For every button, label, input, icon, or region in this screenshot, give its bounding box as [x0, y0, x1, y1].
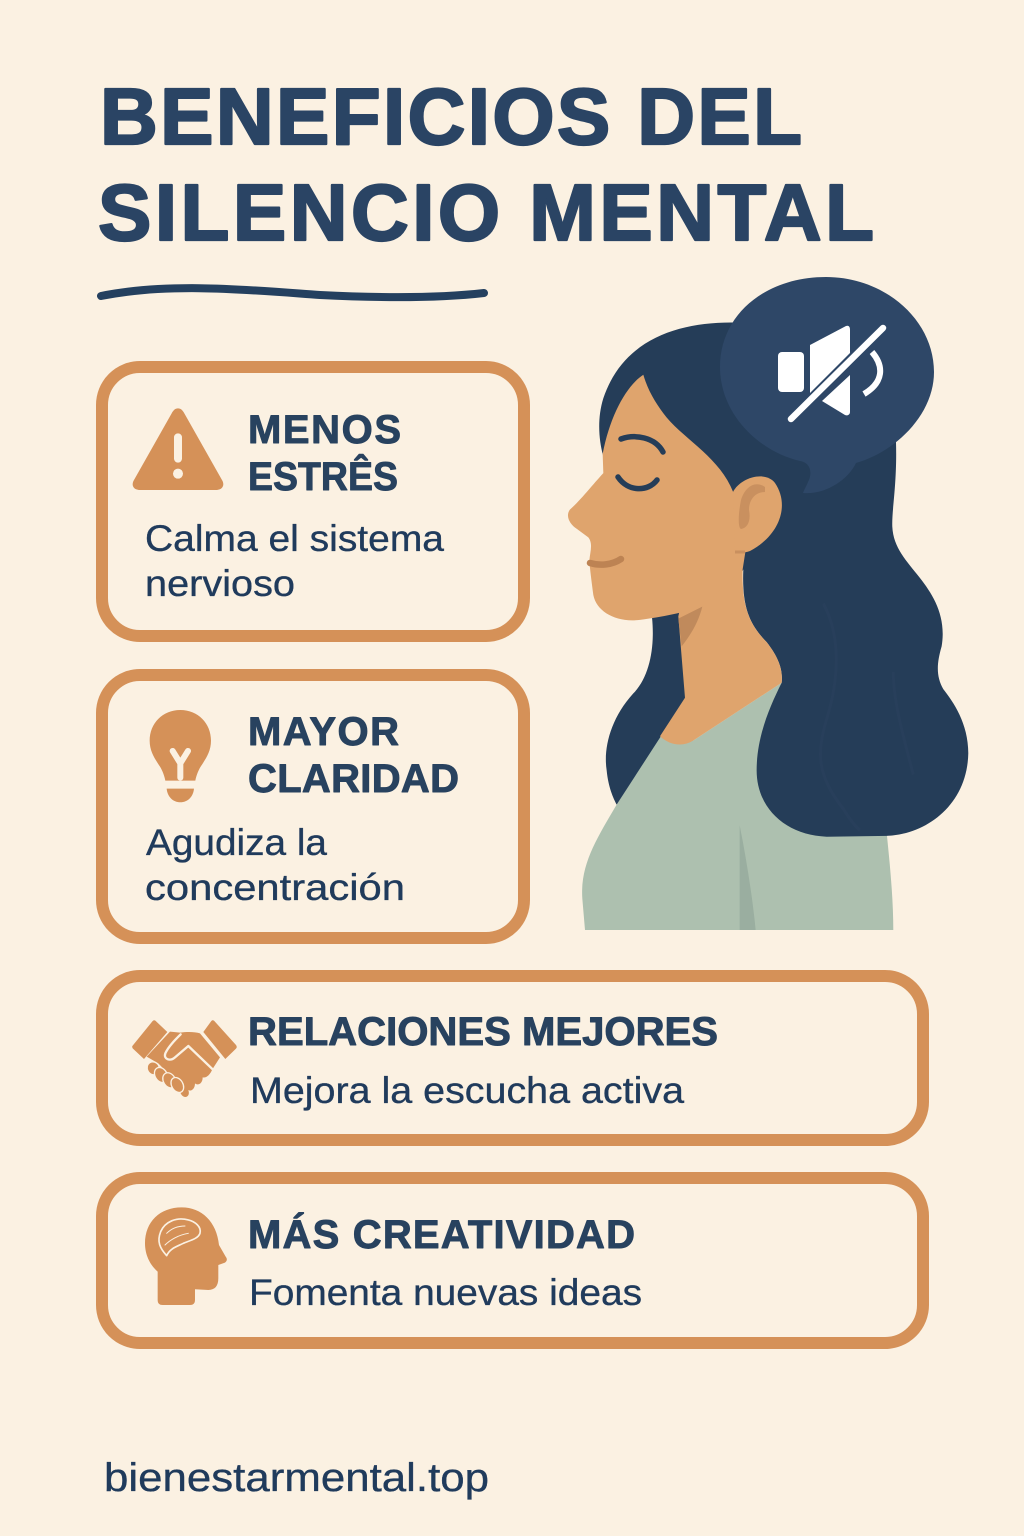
ear: [733, 476, 782, 553]
illustration: woman in profile with silence bubble: [568, 277, 968, 930]
shirt fold: [740, 825, 756, 930]
heading: mayor claridad: [248, 710, 459, 801]
text: calma el sistema nervioso: [145, 518, 444, 604]
text: agudiza la concentración: [145, 822, 405, 908]
title: SILENCIO MENTAL: [98, 168, 874, 257]
icon: warning triangle: [133, 408, 223, 490]
panel: mayor claridad: [102, 675, 524, 938]
text: fomenta nuevas ideas: Fomenta nuevas ideas: [249, 1272, 642, 1313]
ear lobe crease: [735, 550, 745, 554]
heading: menos estrés: MENOS: [248, 408, 401, 452]
eyebrow: [621, 437, 663, 452]
title underline: [101, 288, 484, 297]
icon: light bulb: [150, 710, 211, 802]
heading: relaciones mejores: RELACIONES MEJORES: [248, 1010, 718, 1054]
heading: menos estrés: [248, 408, 401, 499]
neck shadow: [678, 607, 702, 646]
icon: muted speaker: [778, 326, 883, 419]
heading: mayor claridad: CLARIDAD: [248, 757, 459, 801]
icon: head with brain: [145, 1207, 227, 1305]
heading: más creatividad: MÁS CREATIVIDAD: [248, 1212, 635, 1257]
text: calma el sistema nervioso: nervioso: [145, 563, 295, 604]
closed eye: [618, 477, 657, 489]
text: agudiza la concentración: Agudiza la: [146, 822, 327, 863]
panel: menos estrés: [102, 367, 524, 636]
mouth: [590, 559, 621, 565]
heading: menos estrés: ESTRÊS: [248, 453, 398, 499]
neck: [660, 548, 782, 744]
footer url: bienestarmental.top: [104, 1456, 489, 1500]
hair: [599, 313, 968, 837]
panel: más creatividad: [102, 1178, 923, 1343]
hair strands: [820, 604, 913, 830]
text: mejora la escucha activa: Mejora la escucha activa: [250, 1070, 684, 1111]
heading: mayor claridad: MAYOR: [248, 710, 399, 754]
ear detail: [739, 484, 765, 529]
text: agudiza la concentración: concentración: [145, 867, 405, 908]
title: [98, 72, 874, 257]
face: [568, 375, 746, 620]
speech bubble: [720, 277, 934, 493]
body and hair shapes: [568, 313, 968, 930]
text: calma el sistema nervioso: Calma el sistema: [145, 518, 444, 559]
icon: handshake: [132, 1020, 237, 1097]
panel: relaciones mejores: [102, 976, 923, 1140]
title: BENEFICIOS DEL: [100, 72, 802, 161]
shirt: [582, 683, 893, 930]
